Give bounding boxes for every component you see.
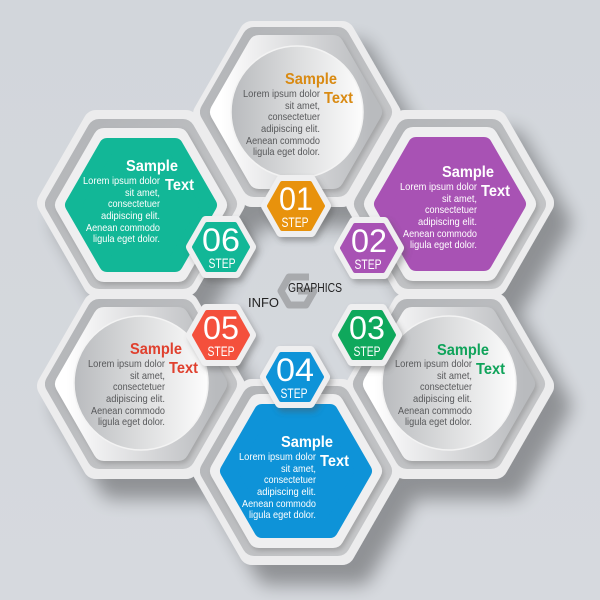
step badge 01: 01 — [279, 181, 313, 217]
panel: step 1 sample text: consectetuer — [268, 111, 320, 123]
step badge 03 — [337, 309, 397, 361]
panel: step 4 sample text: sit amet, — [281, 463, 316, 475]
panel: step 5 sample text — [57, 311, 225, 457]
step badge 02: 02 — [351, 223, 387, 259]
panel: step 3 sample text: adipiscing elit. — [413, 393, 472, 405]
panel: step 2 sample text: consectetuer — [425, 204, 477, 216]
panel: step 4 sample text: adipiscing elit. — [257, 486, 316, 498]
panel: step 2 sample text: Sample — [442, 164, 494, 181]
panel: step 1 sample text: adipiscing elit. — [261, 123, 320, 135]
step badge 06: STEP — [208, 255, 236, 271]
step badge 01 — [266, 180, 326, 232]
panel: step 3 sample text: Lorem ipsum dolor — [395, 358, 472, 370]
step badge 05 — [191, 309, 251, 361]
panel: step 1 sample text: Text — [324, 90, 353, 107]
panel: step 5 sample text: Text — [169, 360, 198, 377]
step badge 06 — [191, 221, 251, 273]
panel: step 5 sample text: consectetuer — [113, 381, 165, 393]
panel: step 6 sample text: Text — [165, 177, 194, 194]
step badge 04 — [265, 351, 325, 403]
panel: step 4 sample text: consectetuer — [264, 474, 316, 486]
panel: step 6 sample text — [57, 131, 225, 277]
panel: step 2 sample text: Text — [481, 183, 510, 200]
panel: step 1 sample text: sit amet, — [285, 100, 320, 112]
panel: step 2 sample text: ligula eget dolor. — [410, 239, 477, 251]
panel: step 5 sample text: adipiscing elit. — [106, 393, 165, 405]
step badge 01: STEP — [282, 214, 308, 230]
panel: step 1 sample text: Aenean commodo — [246, 135, 320, 147]
outer hexagon web — [50, 34, 541, 552]
panel: step 5 sample text: Aenean commodo — [91, 405, 165, 417]
panel: step 5 sample text: ligula eget dolor. — [98, 416, 165, 428]
panel: step 6 sample text: sit amet, — [125, 187, 160, 199]
step badge 02 — [339, 222, 399, 274]
panel: step 5 sample text: Lorem ipsum dolor — [88, 358, 165, 370]
panel: step 4 sample text: Aenean commodo — [242, 498, 316, 510]
panel: step 4 sample text: ligula eget dolor. — [249, 509, 316, 521]
panel: step 6 sample text: Aenean commodo — [86, 222, 160, 234]
step badge 05: STEP — [208, 343, 234, 359]
panel: step 1 sample text: ligula eget dolor. — [253, 146, 320, 158]
panel: step 4 sample text: Lorem ipsum dolor — [239, 451, 316, 463]
panel: step 4 sample text — [212, 398, 380, 544]
panel: step 2 sample text: Aenean commodo — [403, 228, 477, 240]
step badge 05: 05 — [203, 310, 239, 346]
panel: step 1 sample text: Lorem ipsum dolor — [243, 88, 320, 100]
panel: step 6 sample text: Sample — [126, 158, 178, 175]
panel: step 5 sample text: sit amet, — [130, 370, 165, 382]
step badge 02: STEP — [354, 256, 382, 272]
center logo: infographics: INFO — [248, 295, 279, 310]
panel: step 6 sample text: ligula eget dolor. — [93, 233, 160, 245]
panel: step 6 sample text: consectetuer — [108, 198, 160, 210]
panel: step 2 sample text: Lorem ipsum dolor — [400, 181, 477, 193]
panel: step 2 sample text: adipiscing elit. — [418, 216, 477, 228]
step badge 04: STEP — [280, 385, 308, 401]
panel: step 4 sample text: Text — [320, 453, 349, 470]
step badge 04: 04 — [276, 352, 314, 388]
step badge 06: 06 — [202, 222, 240, 258]
panel: step 2 sample text: sit amet, — [442, 193, 477, 205]
panel: step 3 sample text — [365, 311, 533, 457]
panel: step 2 sample text — [366, 131, 534, 277]
panel: step 5 sample text: Sample — [130, 341, 182, 358]
panel: step 3 sample text: Text — [476, 361, 505, 378]
panel: step 1 sample text: Sample — [285, 71, 337, 88]
panel: step 3 sample text: sit amet, — [437, 370, 472, 382]
center logo: infographics — [248, 277, 342, 310]
panel: step 3 sample text: consectetuer — [420, 381, 472, 393]
panel: step 6 sample text: adipiscing elit. — [101, 210, 160, 222]
panel: step 6 sample text: Lorem ipsum dolor — [83, 175, 160, 187]
panel: step 1 sample text — [212, 39, 380, 185]
panel: step 3 sample text: ligula eget dolor. — [405, 416, 472, 428]
step badge 03: 03 — [349, 310, 385, 346]
panel: step 3 sample text: Sample — [437, 342, 489, 359]
step badge 03: STEP — [354, 343, 380, 359]
panel: step 3 sample text: Aenean commodo — [398, 405, 472, 417]
center logo: infographics: GRAPHICS — [288, 280, 342, 295]
panel: step 4 sample text: Sample — [281, 434, 333, 451]
